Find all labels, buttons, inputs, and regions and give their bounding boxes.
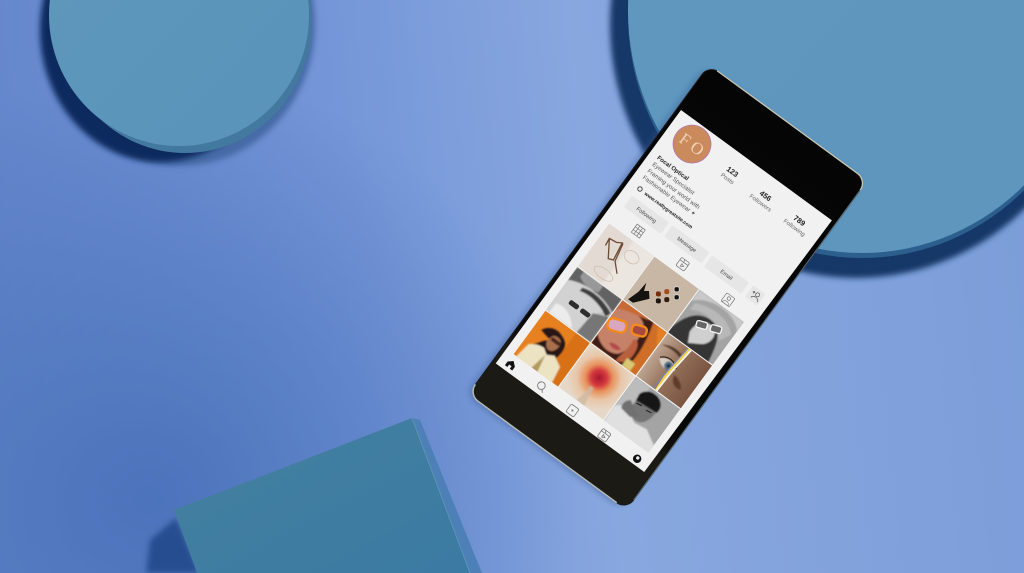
stat: following — [782, 210, 812, 238]
bottom nav icon: reels — [597, 428, 611, 442]
stat: followers — [748, 185, 779, 214]
screen — [496, 110, 832, 474]
photo: eye with rainbow light — [636, 333, 712, 408]
button: following: Following — [635, 206, 657, 225]
profile bio — [641, 155, 711, 218]
bottom nav icon: home — [505, 358, 517, 370]
tab icon: grid — [631, 224, 645, 238]
photo: red blurred flower — [559, 344, 635, 420]
stat: posts — [719, 164, 741, 186]
stat: following: 789 — [792, 213, 807, 228]
profile link: www.reallygreatsite.com — [642, 191, 694, 231]
bottom nav icon: profile — [631, 453, 643, 465]
profile avatar — [665, 118, 719, 171]
photo: black and white blonde with sunglasses — [546, 267, 622, 342]
button: following — [624, 196, 669, 234]
phone silver edges — [468, 65, 867, 510]
bottom nav icon: create post — [566, 404, 579, 417]
profile bio: Fashionable Eyewear ✦ — [641, 174, 697, 218]
profile avatar: F O — [676, 129, 708, 160]
stat: posts: 123 — [725, 164, 740, 179]
profile bio: Framing your world with — [646, 169, 701, 211]
button: message: Message — [675, 236, 697, 254]
phone — [468, 65, 867, 510]
square block: bottom — [146, 418, 482, 573]
photo: hand and sunglasses — [623, 256, 698, 332]
photo: eyeglasses on beige — [578, 224, 654, 298]
round block: top left — [40, 0, 315, 166]
profile bio: Focal Optical — [656, 155, 690, 182]
bottom nav icon: search — [535, 380, 548, 393]
tab icon: reels — [676, 257, 690, 271]
photo: woman in orange sunglasses — [591, 300, 667, 376]
stat: followers: Followers — [748, 194, 772, 214]
profile bio: Eyewear Specialist — [651, 162, 695, 197]
stat: posts: Posts — [719, 173, 735, 186]
photo grid — [512, 223, 746, 456]
photo: black and white woman in hat — [668, 290, 744, 364]
button: add person — [745, 285, 765, 306]
phone shadow — [464, 66, 863, 510]
photo: woman in orange background — [514, 310, 590, 386]
photo: black and white man with hand on chin — [604, 376, 680, 452]
round block: top right — [610, 0, 1024, 278]
button: message — [664, 225, 710, 264]
stat: following: Following — [782, 219, 806, 238]
button: email: Email — [719, 269, 733, 282]
phone body — [468, 65, 867, 510]
button: email — [704, 255, 749, 294]
tab icon: tagged — [721, 293, 735, 307]
stat: followers: 456 — [758, 189, 773, 203]
